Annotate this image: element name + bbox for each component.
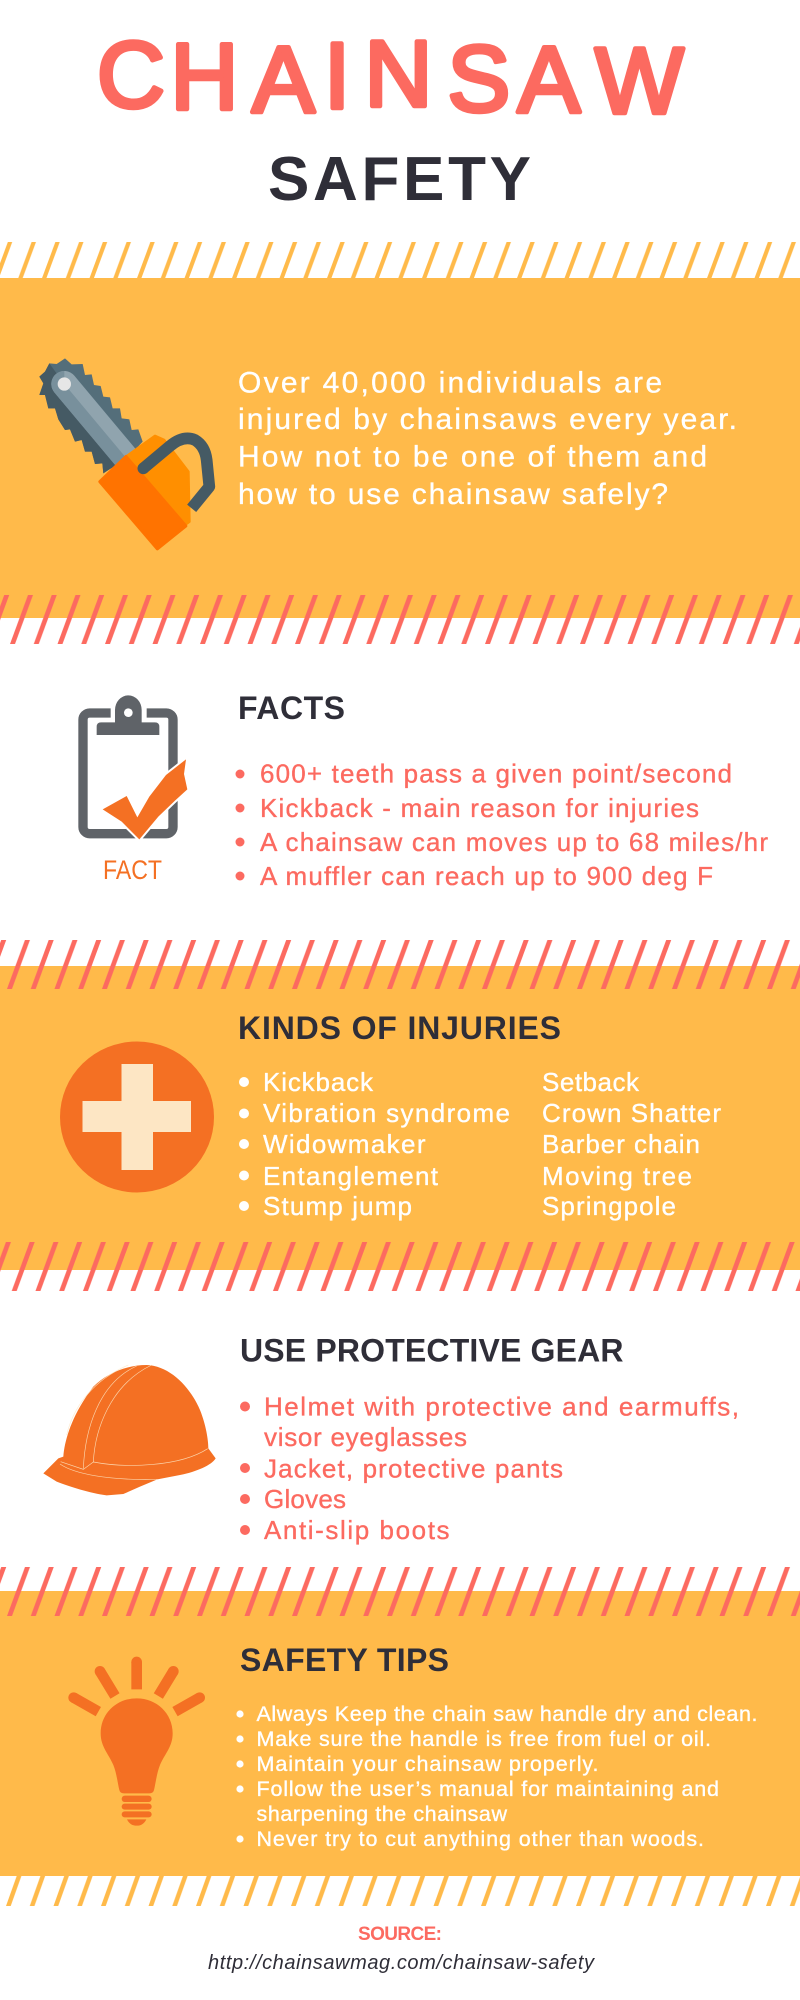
list: injuries column 1: Kickback — [263, 1067, 374, 1097]
list: facts — [236, 758, 768, 891]
source label: SOURCE: — [358, 1924, 442, 1945]
list: gear — [240, 1392, 739, 1545]
list: injuries column 2: Moving tree — [542, 1161, 692, 1191]
list: gear: Gloves — [264, 1484, 346, 1514]
panel: safety tips — [0, 1567, 800, 1906]
text: intro: how to use chainsaw safely? — [238, 478, 668, 511]
text: intro: How not to be one of them and — [238, 440, 707, 474]
panel: kinds of injuries — [0, 940, 800, 1291]
list: injuries column 1 — [239, 1067, 510, 1221]
list: injuries column 2: Crown Shatter — [542, 1098, 721, 1128]
list: injuries column 1: Entanglement — [263, 1161, 439, 1191]
icon: hard hat — [43, 1365, 216, 1495]
list: tips: Follow the user’s manual for maintaining and — [256, 1777, 719, 1801]
list: gear: Jacket, protective pants — [264, 1454, 563, 1484]
list: tips: Make sure the handle is free from fuel or oil. — [256, 1727, 711, 1751]
icon: light bulb — [68, 1657, 205, 1826]
heading: safety tips: SAFETY TIPS — [240, 1642, 449, 1678]
panel: intro band — [0, 242, 800, 644]
list: facts: A chainsaw can moves up to 68 miles/hr — [260, 827, 768, 857]
list: injuries column 2: Springpole — [542, 1191, 676, 1221]
list: gear: Anti-slip boots — [264, 1515, 450, 1545]
list: gear: Helmet with protective and earmuffs, — [264, 1392, 739, 1422]
title: Chainsaw: CHAINSAW — [97, 21, 684, 133]
list: tips: Never try to cut anything other than woods. — [256, 1827, 704, 1851]
list: tips — [236, 1702, 757, 1851]
list: injuries column 1: Vibration syndrome — [263, 1098, 510, 1128]
heading: kinds of injuries: KINDS OF INJURIES — [238, 1010, 561, 1046]
list: tips: sharpening the chainsaw — [256, 1802, 507, 1826]
list: tips: Maintain your chainsaw properly. — [256, 1752, 598, 1776]
source url: http://chainsawmag.com/chainsaw-safety — [208, 1952, 595, 1974]
heading: facts: FACTS — [238, 690, 345, 726]
list: facts: 600+ teeth pass a given point/second — [260, 758, 732, 788]
list: injuries column 2: Barber chain — [542, 1129, 700, 1159]
panel: protective gear — [43, 1332, 739, 1545]
heading: use protective gear: USE PROTECTIVE GEAR — [240, 1332, 624, 1368]
list: facts: A muffler can reach up to 900 deg F — [260, 861, 713, 891]
list: gear: visor eyeglasses — [264, 1422, 467, 1452]
list: injuries column 2 — [542, 1067, 721, 1221]
text: intro: Over 40,000 individuals are — [238, 366, 662, 400]
panel: facts — [83, 690, 768, 891]
text: intro — [238, 366, 737, 511]
list: injuries column 1: Widowmaker — [263, 1129, 426, 1159]
list: tips: Always Keep the chain saw handle dry and clean. — [256, 1702, 758, 1726]
list: facts: Kickback - main reason for injuries — [260, 793, 699, 823]
icon: clipboard with check — [83, 695, 187, 839]
icon: chainsaw — [39, 358, 209, 549]
label: fact: FACT — [103, 855, 162, 885]
list: injuries column 1: Stump jump — [263, 1191, 412, 1221]
list: injuries column 2: Setback — [542, 1067, 640, 1097]
title: Safety: SAFETY — [268, 145, 531, 214]
text: intro: injured by chainsaws every year. — [238, 403, 737, 436]
icon: medical cross — [60, 1042, 214, 1192]
